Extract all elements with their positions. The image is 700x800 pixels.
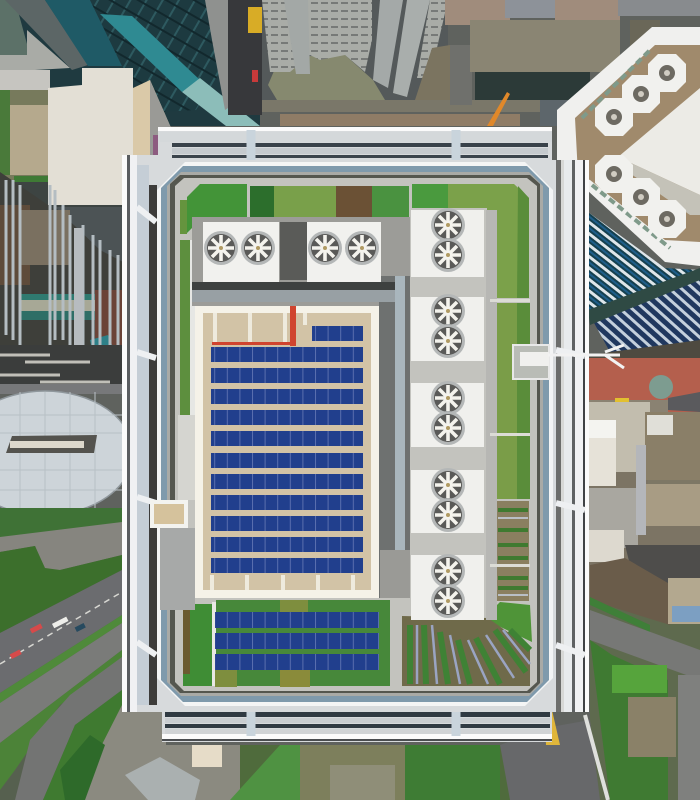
red plaza [588,358,700,412]
highways [0,570,122,800]
road south of towers [262,45,562,126]
plant deck and pipework [150,217,410,610]
main solar array [211,326,363,573]
bottom landscape [300,710,608,800]
gantry on right edge [513,345,624,379]
lower garden [183,600,390,687]
top road [228,0,262,115]
striped towers at right [588,212,700,358]
main deck [195,306,379,598]
dome roof [0,390,122,508]
top residential towers [262,0,448,105]
planted beds at bottom right [402,616,530,686]
upper right tower with fans [557,27,700,266]
lower solar rows [215,612,379,670]
top cooling towers [203,222,381,282]
lower right buildings [588,402,700,625]
top left plaza and glass towers [0,0,260,126]
inner walkway ring [157,162,553,706]
building outer frame [122,127,589,742]
white tower and roof terrace at upper left [0,68,172,205]
street and park lower right [590,597,700,800]
parking and planting lower left [0,508,125,633]
left towers [0,172,123,370]
stepped platforms [0,345,122,394]
cross walkways through green [490,299,530,567]
upper right blocks and crane [445,0,700,126]
right cooling towers [411,208,497,620]
green roof strips [180,184,532,642]
lower left car park and sheds [60,705,300,800]
